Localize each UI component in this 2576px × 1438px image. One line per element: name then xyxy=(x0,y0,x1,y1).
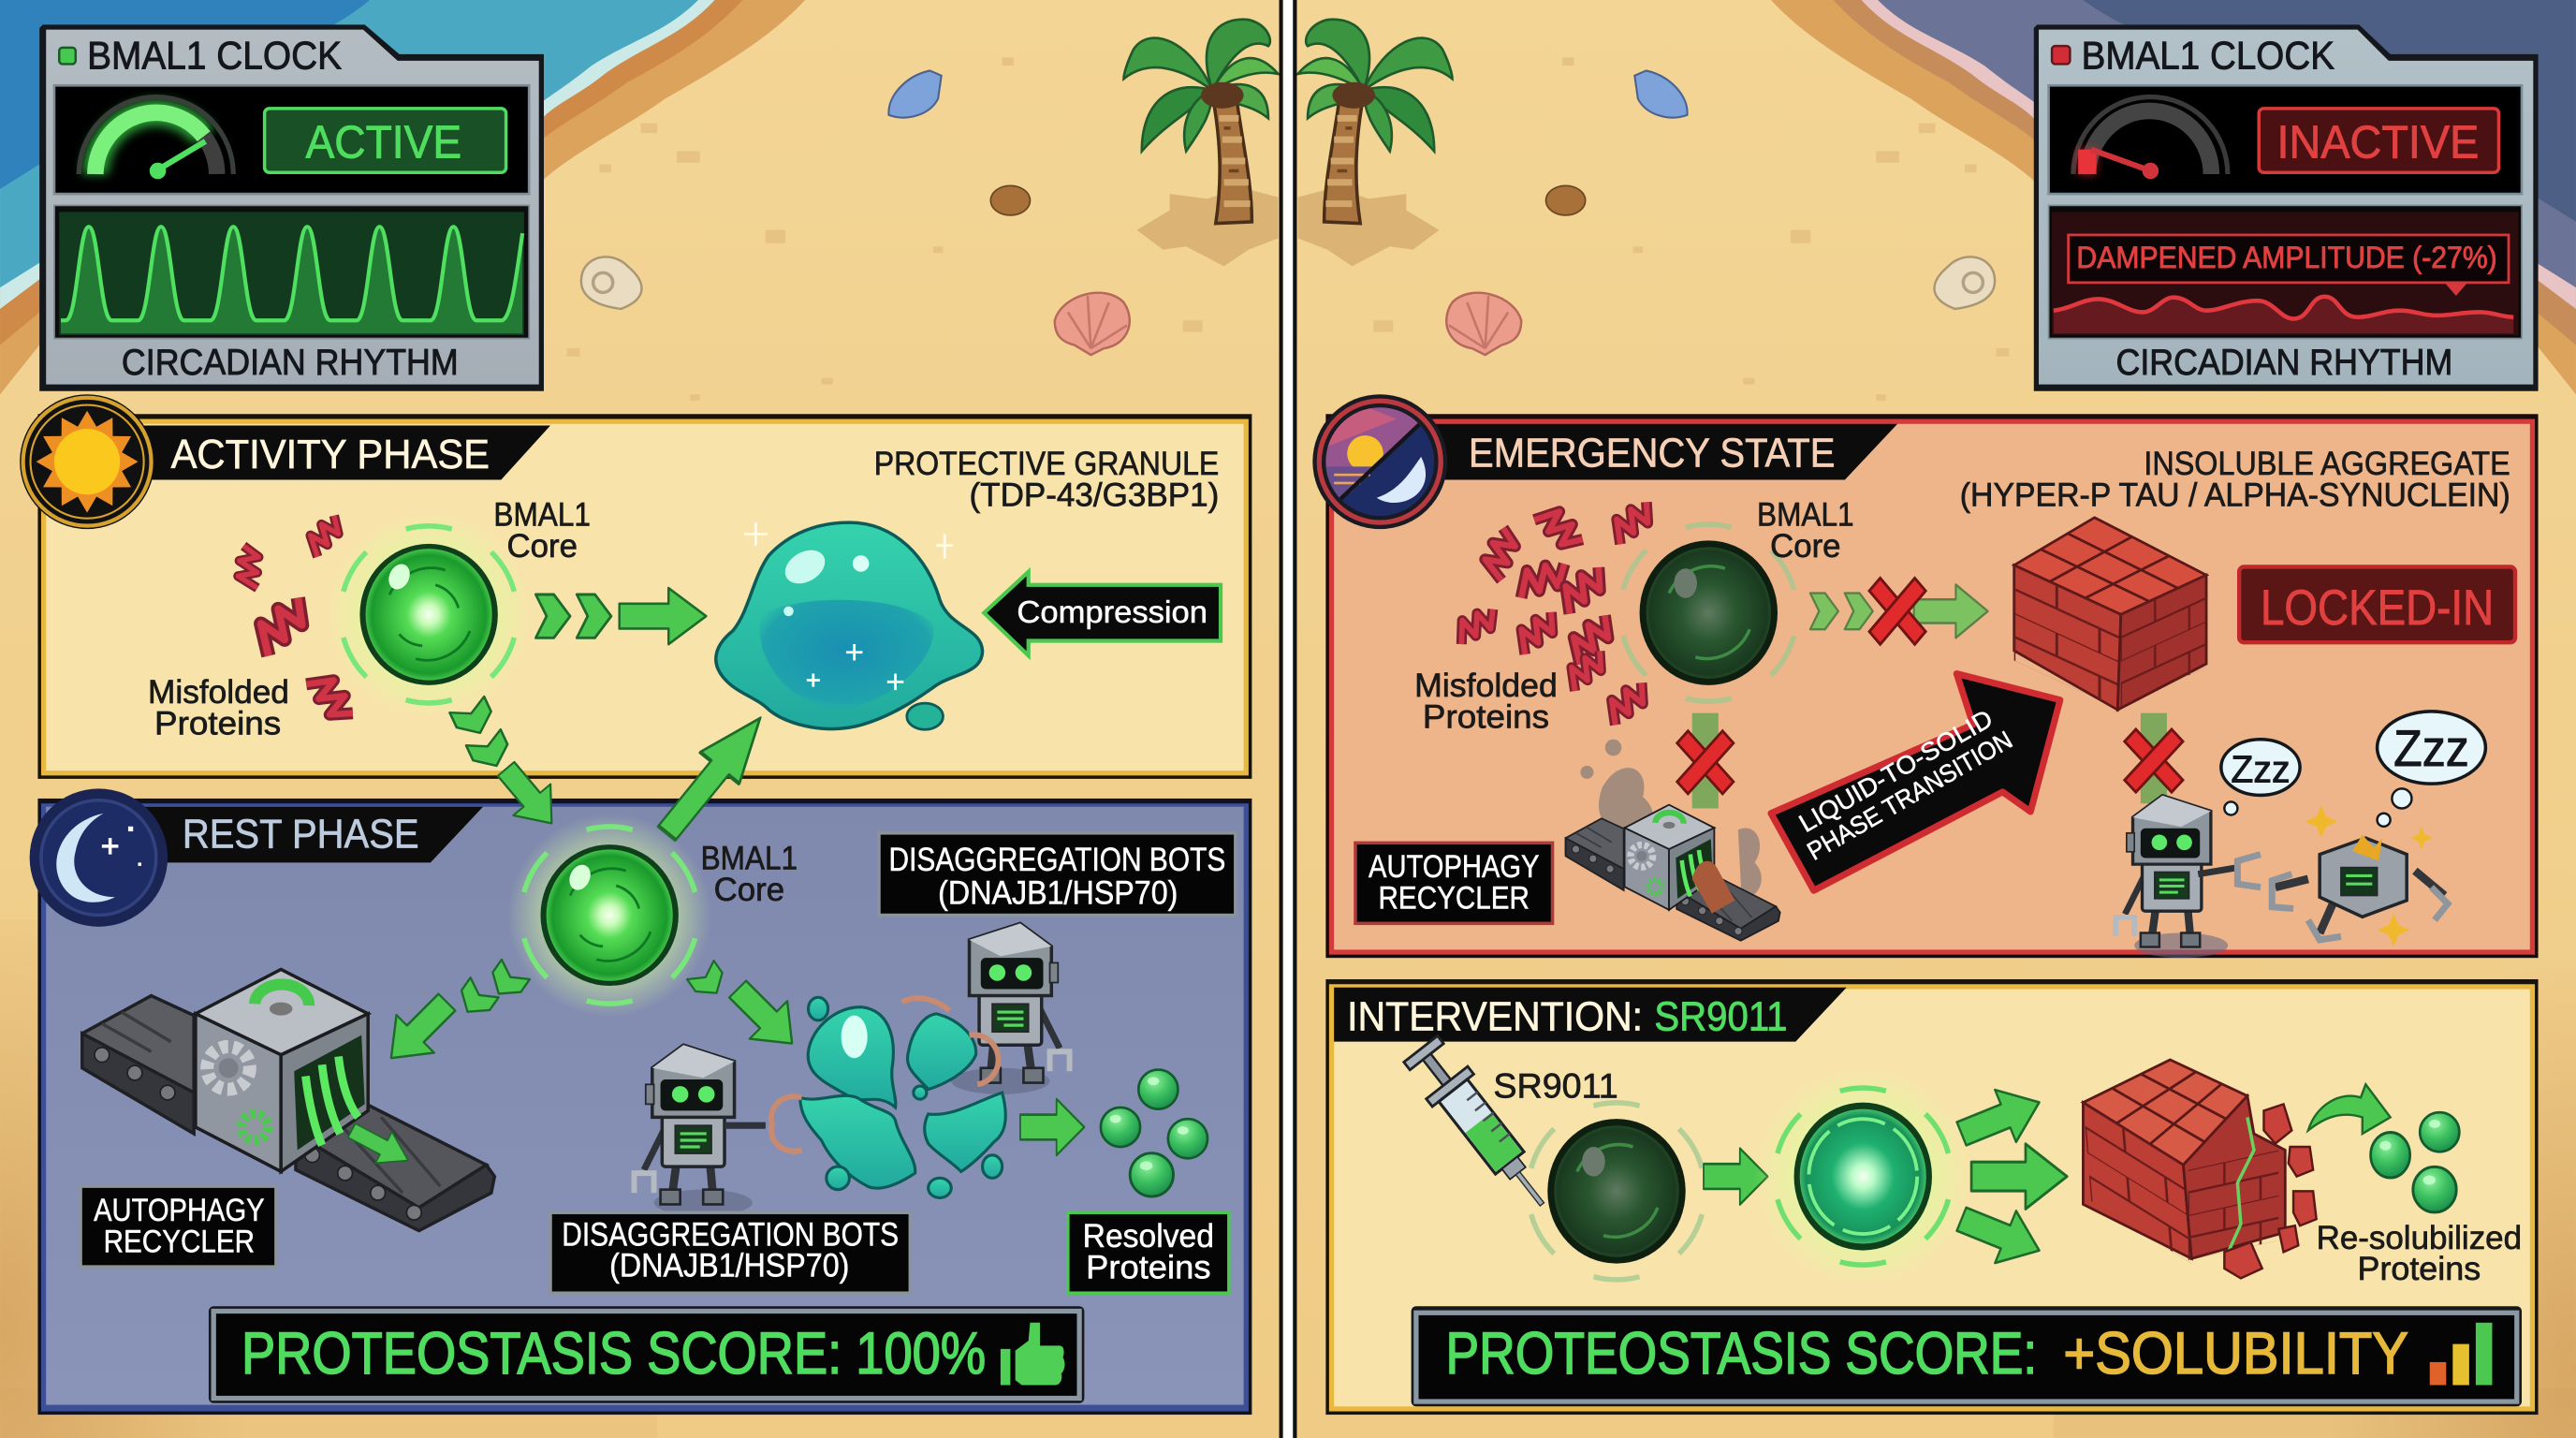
icon: moon badge xyxy=(30,788,168,927)
damaged recycler with smoke xyxy=(1566,740,1780,941)
speech bubble: Zzz large xyxy=(2378,712,2485,827)
status: INACTIVE xyxy=(2259,109,2498,172)
status LED xyxy=(59,48,76,64)
re-solubilized protein balls xyxy=(2371,1112,2459,1212)
clock heading: BMAL1 CLOCK xyxy=(2082,34,2334,78)
label: re-solubilized proteins xyxy=(2317,1220,2522,1287)
blocked arrow: core to recycler xyxy=(1677,713,1734,808)
label: BMAL1 core: Core xyxy=(714,872,784,908)
icon: sunset and moon badge xyxy=(1312,394,1447,529)
protective granule blob xyxy=(716,522,983,729)
panel: BMAL1 clock inactive xyxy=(2034,24,2539,391)
label box: disaggregation bots bottom: (DNAJB1/HSP70) xyxy=(609,1248,849,1284)
label box: disaggregation bots top xyxy=(879,833,1236,916)
callout arrow: compression: Compression xyxy=(1017,595,1208,630)
blocked arrow: core to aggregate xyxy=(1810,579,1988,644)
arrow: rest core up to granule xyxy=(648,702,780,849)
BMAL1 core orb xyxy=(507,814,711,1017)
circadian label: CIRCADIAN RHYTHM xyxy=(2116,343,2452,383)
label: re-solubilized proteins: Proteins xyxy=(2358,1251,2481,1287)
label: insoluble aggregate xyxy=(1960,446,2510,514)
label box: disaggregation bots bottom: DISAGGREGATION BOTS xyxy=(562,1216,899,1253)
label box: autophagy recycler: AUTOPHAGY xyxy=(1368,849,1540,885)
label: protective granule xyxy=(874,446,1219,514)
disaggregation robot right xyxy=(951,923,1070,1094)
gauge xyxy=(79,97,233,179)
autophagy recycler machine xyxy=(82,969,494,1231)
BMAL1 core orb xyxy=(327,513,531,716)
disaggregation robot left xyxy=(634,1045,802,1216)
rest phase contents xyxy=(80,814,1236,1403)
heading: emergency state: EMERGENCY STATE xyxy=(1469,430,1835,476)
arrow: core to granule xyxy=(535,588,706,644)
label: BMAL1 core: BMAL1 xyxy=(1757,497,1854,534)
inactive BMAL1 core orb xyxy=(1623,524,1794,701)
right robot claw xyxy=(902,998,999,1084)
label box: resolved proteins: Resolved xyxy=(1083,1218,1214,1255)
callout: dampened amplitude xyxy=(2069,235,2509,296)
label box: disaggregation bots top: DISAGGREGATION BOTS xyxy=(889,842,1225,878)
gauge screen xyxy=(54,85,529,194)
score bar: 100% xyxy=(209,1306,1084,1403)
label box: autophagy recycler: RECYCLER xyxy=(1379,881,1530,917)
speech bubble: Zzz large: Zzz xyxy=(2393,720,2469,777)
brick aggregate cube xyxy=(2014,518,2206,710)
heading: emergency state xyxy=(1412,424,1897,479)
label: BMAL1 core: Core xyxy=(1770,528,1841,565)
gauge xyxy=(2073,97,2228,179)
panel: intervention SR9011 xyxy=(1325,979,2539,1415)
resolved protein balls xyxy=(1101,1070,1208,1196)
label: insoluble aggregate: (HYPER-P TAU / ALPHA-SYNUCLEIN) xyxy=(1960,477,2510,514)
inactive orb xyxy=(1531,1103,1702,1280)
heading: rest phase xyxy=(124,807,483,862)
label: protective granule: (TDP-43/G3BP1) xyxy=(970,477,1219,514)
label box: autophagy recycler xyxy=(80,1186,276,1267)
shoreline: daytime water xyxy=(0,0,805,394)
label: SR9011: SR9011 xyxy=(1493,1066,1618,1105)
label box: resolved proteins xyxy=(1068,1212,1229,1293)
broken robot xyxy=(2272,805,2448,946)
gauge screen xyxy=(2049,85,2522,194)
label: BMAL1 core: BMAL1 xyxy=(701,840,798,876)
arrow: liquid-to-solid phase transition: PHASE TRANSITION xyxy=(1802,725,2017,866)
dampened wave chart xyxy=(2049,205,2522,339)
arrow: liquid-to-solid phase transition: LIQUID-TO-SOLID xyxy=(1793,703,1998,838)
centre divider xyxy=(1280,0,1296,1438)
panel: activity phase xyxy=(20,394,1251,779)
misfolded proteins: Misfolded xyxy=(148,674,289,711)
score bar: solubility: +SOLUBILITY xyxy=(2063,1321,2408,1387)
speech bubble: Zzz small xyxy=(2221,740,2300,814)
label: protective granule: PROTECTIVE GRANULE xyxy=(874,446,1219,482)
blocked arrow: aggregate to bots xyxy=(2125,713,2183,803)
panel: emergency state xyxy=(1312,394,2539,958)
status: locked-in: LOCKED-IN xyxy=(2261,580,2494,636)
label box: autophagy recycler xyxy=(1355,843,1553,923)
panel: rest phase xyxy=(30,788,1251,1415)
label: BMAL1 core: BMAL1 xyxy=(493,497,591,534)
status: ACTIVE: ACTIVE xyxy=(305,117,461,168)
callout arrow: compression xyxy=(984,572,1221,655)
score bar: solubility: PROTEOSTASIS SCORE: xyxy=(1445,1321,2037,1387)
icon: syringe xyxy=(1400,1033,1563,1221)
right beach decor: palm tree and shells xyxy=(1298,20,2009,401)
misfolded proteins cluster: Misfolded xyxy=(1414,668,1558,704)
arrow: core to bots xyxy=(687,961,811,1063)
curved arrow to soluble proteins xyxy=(2308,1084,2391,1134)
label: BMAL1 core xyxy=(701,840,798,908)
broken granule pieces xyxy=(800,997,1005,1197)
label box: resolved proteins: Proteins xyxy=(1086,1249,1211,1285)
brick chunks xyxy=(2224,1104,2317,1278)
label: re-solubilized proteins: Re-solubilized xyxy=(2317,1220,2522,1256)
label: BMAL1 core: Core xyxy=(506,528,578,565)
status: INACTIVE: INACTIVE xyxy=(2277,117,2479,168)
arrow: activity core down to rest core xyxy=(449,697,570,839)
heading: activity phase: ACTIVITY PHASE xyxy=(171,432,490,477)
arrow: bots to resolved proteins xyxy=(1020,1099,1084,1155)
label: BMAL1 core xyxy=(493,497,591,565)
clock heading: BMAL1 CLOCK xyxy=(87,34,342,78)
heading: intervention: INTERVENTION: xyxy=(1347,993,1643,1039)
arrow: liquid-to-solid phase transition xyxy=(1771,674,2060,890)
label: insoluble aggregate: INSOLUBLE AGGREGATE xyxy=(2144,446,2510,482)
circadian wave chart xyxy=(54,205,529,339)
score bar: 100%: PROTEOSTASIS SCORE: 100% xyxy=(242,1321,986,1387)
arrows: orb to wall xyxy=(1951,1077,2067,1277)
misfolded proteins xyxy=(148,515,354,741)
highlight on granule pieces xyxy=(842,1016,868,1058)
label box: disaggregation bots bottom xyxy=(550,1212,910,1293)
shoreline: dusk water xyxy=(1771,0,2576,394)
heading: intervention xyxy=(1334,988,1847,1042)
status: ACTIVE xyxy=(265,109,506,172)
heading: rest phase: REST PHASE xyxy=(183,812,419,858)
label box: autophagy recycler: RECYCLER xyxy=(104,1224,255,1259)
misfolded proteins cluster xyxy=(1414,501,1658,735)
arrow: core to recycler xyxy=(373,960,530,1077)
arrow: orb activation xyxy=(1704,1149,1767,1205)
status: locked-in xyxy=(2239,566,2515,642)
sleeping robot xyxy=(2115,796,2261,958)
reactivated orb xyxy=(1754,1068,1971,1284)
label: BMAL1 core xyxy=(1757,497,1854,565)
left beach decor: palm tree and shells xyxy=(567,20,1278,401)
bar icon xyxy=(2430,1323,2492,1385)
callout: dampened amplitude: DAMPENED AMPLITUDE (-27%) xyxy=(2076,241,2497,274)
crumbling brick wall xyxy=(2083,1060,2285,1264)
icon: thumbs up xyxy=(1001,1323,1064,1385)
panel: BMAL1 clock active xyxy=(39,24,544,391)
misfolded proteins cluster: Proteins xyxy=(1423,698,1549,735)
icon: sun badge xyxy=(20,394,154,529)
score bar: solubility xyxy=(1412,1306,2522,1406)
misfolded proteins: Proteins xyxy=(154,705,281,741)
label box: disaggregation bots top: (DNAJB1/HSP70) xyxy=(938,874,1178,911)
heading: activity phase xyxy=(115,426,550,479)
label box: autophagy recycler: AUTOPHAGY xyxy=(94,1193,265,1228)
status LED xyxy=(2052,46,2070,64)
heading: intervention: SR9011 xyxy=(1654,993,1788,1039)
speech bubble: Zzz small: Zzz xyxy=(2231,747,2291,790)
circadian label: CIRCADIAN RHYTHM xyxy=(122,343,459,383)
